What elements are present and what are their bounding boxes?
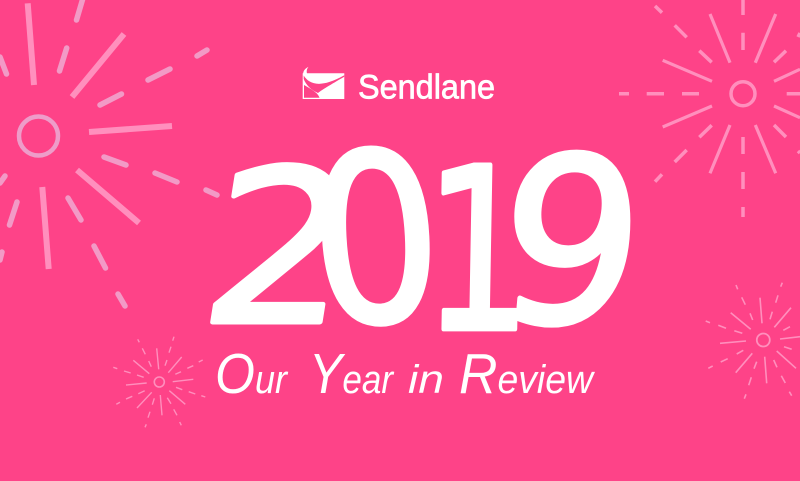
short dashes [706, 283, 792, 399]
subtitle [215, 342, 596, 406]
long rays [126, 348, 193, 415]
firework: large top right [619, 0, 800, 217]
firework ring [19, 116, 58, 156]
title: 2019: 1 [421, 121, 535, 383]
long rays [663, 14, 800, 173]
firework ring [731, 82, 755, 106]
icon: envelope [303, 67, 344, 99]
firework: small bottom right [706, 283, 800, 399]
logo [303, 67, 495, 106]
subtitle: Our [215, 342, 289, 406]
firework ring [154, 377, 164, 387]
subtitle: Year [309, 342, 394, 406]
firework: large top left [0, 0, 217, 306]
title: 2019: 0 [304, 104, 448, 376]
short dashes [0, 0, 217, 306]
firework ring [757, 334, 770, 346]
title: 2019: 9 [488, 109, 654, 376]
subtitle: Review [459, 342, 596, 406]
long rays [28, 3, 172, 269]
subtitle: in [408, 358, 444, 402]
title: 2019: 2 [188, 125, 374, 372]
firework: small bottom left [113, 337, 205, 427]
brand name: Sendlane [358, 68, 495, 106]
short dashes [113, 337, 205, 427]
dashes [619, 0, 800, 217]
long rays [720, 298, 800, 383]
title: 2019 [188, 104, 654, 383]
